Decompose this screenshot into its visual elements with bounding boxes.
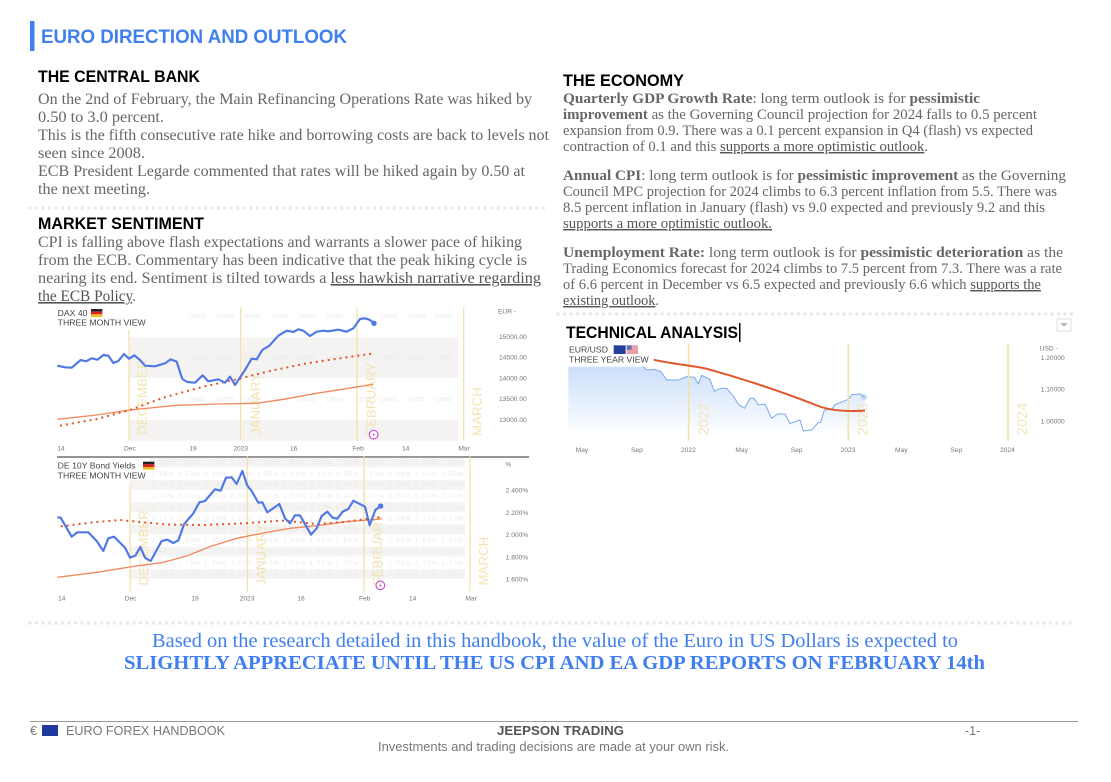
text block: market sentiment commentary: CPI is falling above flash expectations and warrants a slower pace of hiking	[38, 234, 522, 251]
chart: DE 10Y bond yields three month view: 2.10% 2.10% 2.10% 2.10% 2.10% 2.10% 2.10% 2.10% 2.10% 2.10% 2.10% 2.10%	[152, 516, 464, 522]
chart: DAX 40 three month view: 14000	[271, 354, 289, 361]
panel: the economy	[563, 72, 1066, 309]
chart: DAX 40 three month view: 14000	[216, 354, 234, 361]
chart: DAX 40 three month view: DAX 40	[58, 308, 88, 318]
chart: DAX 40 three month view: 14000	[188, 354, 206, 361]
heading: the economy: THE ECONOMY	[563, 72, 684, 90]
chart: EUR/USD three year view: 2024	[1000, 447, 1015, 454]
chart: DAX 40 three month view: 13000	[188, 396, 206, 403]
chart: DE 10Y bond yields three month view: 1.80% 1.80% 1.80% 1.80% 1.80% 1.80% 1.80% 1.80% 1.80% 1.80% 1.80% 1.80%	[152, 550, 464, 556]
text block: central bank commentary: On the 2nd of February, the Main Refinancing Operations Rate was hiked by	[38, 91, 532, 108]
chart: DAX 40 three month view: 15000	[435, 313, 453, 320]
chart: DE 10Y bond yields three month view: 2.400%	[506, 488, 528, 495]
text block: unemployment rate: of 6.6 percent in December vs 6.5 expected and previously 6.6 which supports the	[563, 277, 1041, 293]
chart: EUR/USD three year view: Sep	[631, 447, 643, 454]
title: EURO DIRECTION AND OUTLOOK	[41, 27, 347, 48]
text block: market sentiment commentary	[38, 234, 541, 305]
footer: €	[30, 724, 37, 738]
chart: DAX 40 three month view: 14	[57, 445, 65, 452]
chart: DE 10Y bond yields three month view: 2.200%	[506, 510, 528, 517]
footer	[30, 722, 1078, 754]
chart: DE 10Y bond yields three month view: 1.70% 1.70% 1.70% 1.70% 1.70% 1.70% 1.70% 1.70% 1.70% 1.70% 1.70% 1.70%	[152, 561, 464, 567]
text block: quarterly GDP growth rate: improvement as the Governing Council projection for 2024 falls to 0.5 percent	[563, 107, 1037, 123]
chart: DAX 40 three month view: 13000	[216, 396, 234, 403]
chart: DAX 40 three month view: 13000	[243, 396, 261, 403]
chart: DAX 40 three month view: 15000	[325, 313, 343, 320]
text block: central bank commentary	[38, 91, 550, 198]
chart: DAX 40 three month view: FEBRUARY	[363, 363, 378, 435]
chart: DE 10Y bond yields three month view: 19	[191, 595, 199, 602]
chart: DAX 40 three month view: 14000	[435, 354, 453, 361]
chart: DAX 40 three month view: 14	[402, 445, 410, 452]
text block: annual CPI: supports a more optimistic outlook.	[563, 216, 772, 232]
chart: EUR/USD three year view: 1.20000	[1041, 355, 1065, 362]
chart: DAX 40 three month view: 16	[290, 445, 298, 452]
chart: DAX 40 three month view: 14000	[407, 354, 425, 361]
chart: EUR/USD three year view: Sep	[950, 447, 962, 454]
chart: EUR/USD three year view: 2023	[841, 447, 856, 454]
chart: DE 10Y bond yields three month view: Dec	[125, 595, 137, 602]
chart: DE 10Y bond yields three month view: 2.20% 2.20% 2.20% 2.20% 2.20% 2.20% 2.20% 2.20% 2.20% 2.20% 2.20% 2.20%	[152, 505, 464, 511]
chart: DE 10Y bond yields three month view: 1.800%	[506, 554, 528, 561]
chart: DAX 40 three month view: 15000	[298, 313, 316, 320]
heading: the central bank: THE CENTRAL BANK	[38, 68, 200, 86]
chart: DAX 40 three month view: 14000.00	[499, 375, 527, 382]
chart: DAX 40 three month view: 13500.00	[499, 396, 527, 403]
chart: DAX 40 three month view: Dec	[124, 445, 137, 452]
chart: DAX 40 three month view: 13000	[435, 396, 453, 403]
text block: quarterly GDP growth rate	[563, 91, 1037, 155]
chart: DAX 40 three month view: 13000	[380, 396, 398, 403]
chart: DAX 40 three month view: 14000	[353, 354, 371, 361]
footer: Investments and trading decisions are made at your own risk.	[378, 740, 729, 754]
text block: quarterly GDP growth rate: contraction of 0.1 and this supports a more optimistic outlook.	[563, 139, 928, 155]
chart: DAX 40 three month view: 15000	[353, 313, 371, 320]
chart: DE 10Y bond yields three month view: 2.40% 2.40% 2.40% 2.40% 2.40% 2.40% 2.40% 2.40% 2.40% 2.40% 2.40% 2.40%	[152, 483, 464, 489]
chart: DE 10Y bond yields three month view: 1.60% 1.60% 1.60% 1.60% 1.60% 1.60% 1.60% 1.60% 1.60% 1.60% 1.60% 1.60%	[152, 572, 464, 578]
panel: technical analysis	[566, 319, 1071, 454]
chart: DAX 40 three month view	[57, 307, 527, 452]
chart: DE 10Y bond yields three month view: 2.00% 2.00% 2.00% 2.00% 2.00% 2.00% 2.00% 2.00% 2.00% 2.00% 2.00% 2.00%	[152, 528, 464, 534]
text block: central bank commentary: 0.50 to 3.0 percent.	[38, 109, 164, 126]
chart: DAX 40 three month view: JANUARY	[248, 373, 263, 435]
chart: DE 10Y bond yields three month view: 2.50% 2.50% 2.50% 2.50% 2.50% 2.50% 2.50% 2.50% 2.50% 2.50% 2.50% 2.50%	[152, 472, 464, 478]
chart: DAX 40 three month view: THREE MONTH VIEW	[58, 318, 147, 328]
text block: annual CPI	[563, 168, 1066, 232]
chart: DAX 40 three month view: 13000	[353, 396, 371, 403]
chart: DE 10Y bond yields three month view: Feb	[359, 595, 371, 602]
chart: DAX 40 three month view: 14000	[325, 354, 343, 361]
chart: DAX 40 three month view: 13000	[407, 396, 425, 403]
chart: EUR/USD three year view: 2024	[1015, 403, 1031, 435]
chart: DAX 40 three month view: 15000	[216, 313, 234, 320]
chart: EUR/USD three year view: 2022	[681, 447, 696, 454]
chart: EUR/USD three year view: EUR/USD	[569, 344, 608, 354]
chart: EUR/USD three year view: USD -	[1040, 345, 1058, 352]
chart: DAX 40 three month view: 13000.00	[499, 417, 527, 424]
callout: conclusion: SLIGHTLY APPRECIATE UNTIL THE US CPI AND EA GDP REPORTS ON FEBRUARY 14th	[124, 652, 985, 674]
chart: DAX 40 three month view: DECEMBER	[135, 359, 150, 435]
chart: DE 10Y bond yields three month view: Mar	[465, 595, 478, 602]
panel: market sentiment	[38, 215, 541, 305]
text block: central bank commentary: seen since 2008.	[38, 145, 145, 162]
chart: EUR/USD three year view: May	[735, 447, 749, 454]
chart: DAX 40 three month view: Feb	[352, 445, 364, 452]
text block: central bank commentary: ECB President Legarde commented that rates will be hiked again by 0.50 at	[38, 163, 526, 180]
chart: DAX 40 three month view: 2023	[233, 445, 248, 452]
chart: DAX 40 three month view: 15000	[407, 313, 425, 320]
chart: DE 10Y bond yields three month view: 2.60% 2.60% 2.60% 2.60% 2.60% 2.60% 2.60% 2.60% 2.60% 2.60% 2.60% 2.60%	[152, 461, 464, 467]
text block: unemployment rate	[563, 245, 1063, 309]
text block: unemployment rate: Unemployment Rate: long term outlook is for pessimistic deterioration as the	[563, 245, 1063, 261]
chart: DE 10Y bond yields three month view: DE 10Y Bond Yields	[58, 461, 136, 471]
footer: JEEPSON TRADING	[497, 724, 624, 738]
chart: EUR/USD three year view: 1.10000	[1041, 387, 1065, 394]
chart: DAX 40 three month view: 15000.00	[499, 334, 527, 341]
chart: DE 10Y bond yields three month view: FEBRUARY	[370, 513, 385, 586]
chart: DE 10Y bond yields three month view	[57, 457, 528, 602]
chart: DAX 40 three month view: 14500.00	[499, 355, 527, 362]
chart: DE 10Y bond yields three month view: MARCH	[476, 537, 491, 586]
icon: EU flag	[42, 725, 58, 736]
text block: market sentiment commentary: the ECB Policy.	[38, 288, 136, 305]
chart: DAX 40 three month view: 15000	[271, 313, 289, 320]
chart: DAX 40 three month view: 15000	[188, 313, 206, 320]
footer: EURO FOREX HANDBOOK	[66, 724, 226, 738]
chart: DAX 40 three month view: 15000	[380, 313, 398, 320]
chart: DE 10Y bond yields three month view: 2.000%	[506, 532, 528, 539]
text block: quarterly GDP growth rate: expansion from 0.9. There was a 0.1 percent expansion in Q4 (flash) vs expected	[563, 123, 1034, 139]
icon: dropdown	[1057, 319, 1071, 331]
chart: DE 10Y bond yields three month view: 16	[297, 595, 305, 602]
chart: DE 10Y bond yields three month view: DECEMBER	[136, 510, 151, 586]
chart: EUR/USD three year view: 2022	[696, 403, 712, 435]
chart: DE 10Y bond yields three month view: 2023	[240, 595, 255, 602]
text block: unemployment rate: existing outlook.	[563, 293, 659, 309]
chart: DE 10Y bond yields three month view: JANUARY	[253, 524, 268, 586]
callout: conclusion: Based on the research detailed in this handbook, the value of the Euro in US Dollars is expected to	[152, 630, 958, 652]
chart: DAX 40 three month view: Mar	[458, 445, 471, 452]
chart: DE 10Y bond yields three month view: 1.600%	[506, 577, 528, 584]
title	[30, 21, 347, 51]
chart: DAX 40 three month view: MARCH	[469, 387, 484, 436]
text block: central bank commentary: the next meeting.	[38, 181, 150, 198]
chart: EUR/USD three year view: Sep	[791, 447, 803, 454]
chart: DAX 40 three month view: 13000	[298, 396, 316, 403]
chart: DAX 40 three month view: 13000	[325, 396, 343, 403]
chart: EUR/USD three year view	[568, 344, 1065, 454]
chart: EUR/USD three year view: 2023	[856, 403, 872, 435]
text block: annual CPI: 8.5 percent inflation in January (flash) vs 9.0 expected and previously 9.2 and this	[563, 200, 1045, 216]
chart: DAX 40 three month view: 15000	[243, 313, 261, 320]
chart: DAX 40 three month view: 14000	[380, 354, 398, 361]
chart: EUR/USD three year view: May	[576, 447, 589, 454]
chart: DAX 40 three month view: EUR -	[498, 308, 516, 315]
text block: unemployment rate: Trading Economics forecast for 2024 climbs to 7.5 percent from 7.3. There was a rate	[563, 261, 1062, 277]
chart: DE 10Y bond yields three month view: 1.90% 1.90% 1.90% 1.90% 1.90% 1.90% 1.90% 1.90% 1.90% 1.90% 1.90% 1.90%	[152, 539, 464, 545]
text block: quarterly GDP growth rate: Quarterly GDP Growth Rate : long term outlook is for pessimistic	[563, 91, 981, 107]
text block: central bank commentary: This is the fifth consecutive rate hike and borrowing costs are back to levels not	[38, 127, 550, 144]
heading: market sentiment: MARKET SENTIMENT	[38, 215, 204, 233]
chart: DAX 40 three month view: 14000	[298, 354, 316, 361]
chart: EUR/USD three year view: May	[895, 447, 908, 454]
chart: DE 10Y bond yields three month view: %	[505, 462, 511, 469]
chart: DE 10Y bond yields three month view: 14	[58, 595, 66, 602]
chart: EUR/USD three year view: 1.00000	[1041, 418, 1065, 425]
chart: DAX 40 three month view: 14000	[243, 354, 261, 361]
footer: -1-	[965, 724, 980, 738]
text block: annual CPI: Annual CPI : long term outlook is for pessimistic improvement as the Governing	[563, 168, 1066, 184]
chart: DE 10Y bond yields three month view: THREE MONTH VIEW	[58, 470, 147, 480]
text block: market sentiment commentary: nearing its end. Sentiment is tilted towards a less hawkish narrative regarding	[38, 270, 541, 287]
chart: EUR/USD three year view: THREE YEAR VIEW	[569, 355, 650, 365]
panel: the central bank	[38, 68, 550, 198]
callout: conclusion	[124, 630, 985, 674]
chart: DE 10Y bond yields three month view: 14	[409, 595, 417, 602]
chart: DAX 40 three month view: 19	[189, 445, 197, 452]
heading: technical analysis: TECHNICAL ANALYSIS	[566, 323, 738, 342]
text block: market sentiment commentary: from the ECB. Commentary has been indicative that the peak hiking cycle is	[38, 252, 527, 269]
text block: annual CPI: Council MPC projection for 2024 climbs to 6.3 percent inflation from 5.5. There was	[563, 184, 1057, 200]
chart: DE 10Y bond yields three month view: 2.30% 2.30% 2.30% 2.30% 2.30% 2.30% 2.30% 2.30% 2.30% 2.30% 2.30% 2.30%	[152, 494, 464, 500]
chart: DAX 40 three month view: 13000	[271, 396, 289, 403]
